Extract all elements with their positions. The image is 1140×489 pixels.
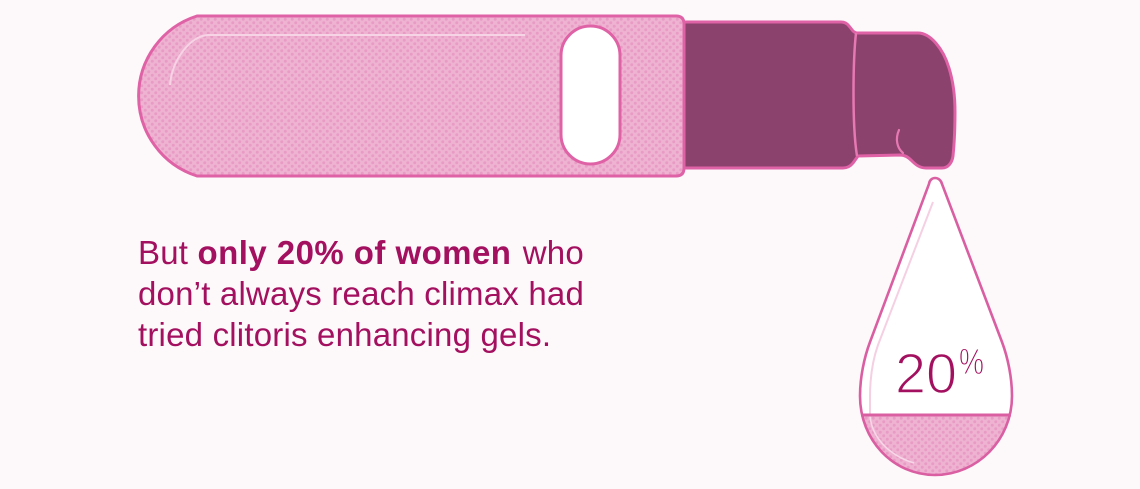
tube body xyxy=(139,16,684,176)
drop liquid highlight xyxy=(870,416,914,463)
body text xyxy=(138,234,584,353)
body text: don’t always reach climax had xyxy=(138,275,584,312)
tube highlight xyxy=(170,35,525,85)
drop outline xyxy=(860,178,1012,475)
cap curl xyxy=(897,130,903,153)
cap seam xyxy=(854,33,857,156)
drop liquid level xyxy=(864,416,1008,474)
tube window xyxy=(561,26,620,164)
drop value: 20 xyxy=(895,342,957,406)
gel drop xyxy=(855,178,1017,480)
body text: tried clitoris enhancing gels. xyxy=(138,316,551,353)
body text: But only 20% of women who xyxy=(138,234,584,271)
tube cap xyxy=(684,22,955,168)
drop highlight xyxy=(870,202,933,414)
liquid line xyxy=(861,414,1011,416)
drop value: % xyxy=(959,341,984,382)
